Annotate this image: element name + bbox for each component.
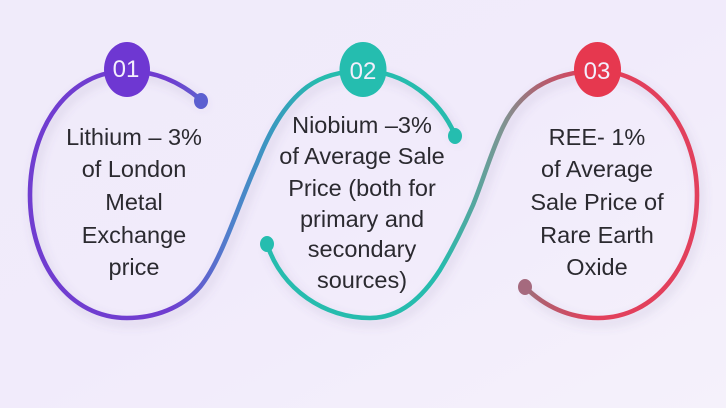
step 02	[260, 42, 462, 293]
curve 1: purple loop into teal arc	[30, 71, 455, 318]
label 02: of Average Sale	[279, 143, 445, 169]
number 01: 01	[113, 56, 139, 83]
curve group	[30, 71, 697, 318]
label 01: of London	[82, 156, 186, 182]
label 03: Rare Earth	[540, 222, 654, 248]
end dot 03	[518, 279, 532, 295]
label 01: Metal	[105, 189, 163, 215]
label 01: Lithium – 3%	[66, 124, 202, 150]
label 02: secondary	[308, 236, 416, 262]
number 03: 03	[584, 58, 610, 85]
badge 02	[340, 42, 386, 97]
label 03: Oxide	[566, 254, 628, 280]
curve 2: teal arc into red loop	[267, 71, 697, 318]
badge 03	[574, 42, 621, 97]
badge 01	[104, 42, 150, 97]
end dots 02	[260, 128, 462, 252]
label 01: Exchange	[82, 222, 186, 248]
label 02: sources)	[317, 267, 407, 293]
step 03	[518, 42, 664, 295]
label 03: Sale Price of	[530, 189, 664, 215]
label 03: REE- 1%	[549, 124, 645, 150]
number 02: 02	[350, 58, 376, 85]
end dot 01	[194, 93, 208, 109]
label 02: Price (both for	[288, 175, 436, 201]
step 01	[66, 42, 208, 280]
label 03: of Average	[541, 156, 653, 182]
label 02: Niobium –3%	[292, 112, 432, 138]
label 02: primary and	[300, 206, 424, 232]
label 01: price	[109, 254, 159, 280]
